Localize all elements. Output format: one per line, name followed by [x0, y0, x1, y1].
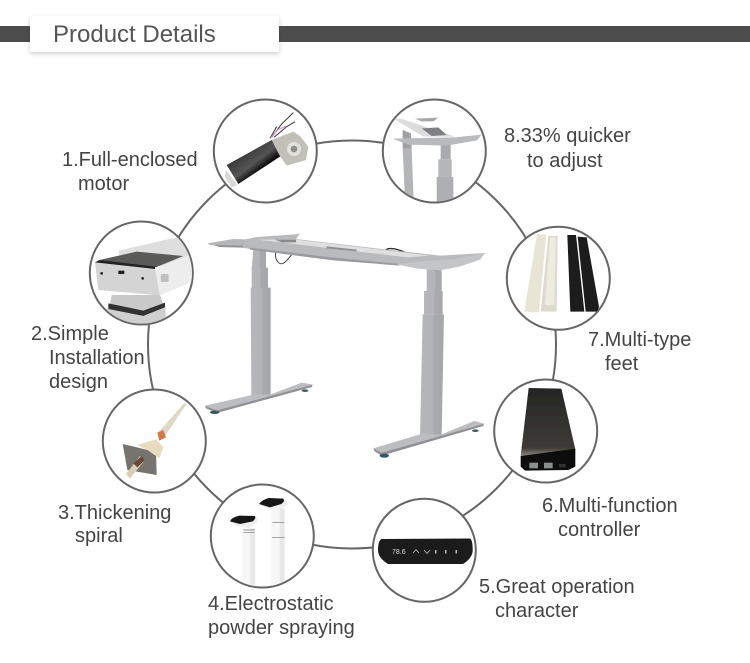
label: great operation character: 5.Great operation — [479, 576, 635, 598]
heading: Product Details: Product Details — [53, 21, 216, 48]
label: thickening spiral — [58, 502, 171, 547]
feature 1: motor — [62, 100, 317, 202]
label: great operation character: character — [495, 600, 579, 622]
feature 3: spiral — [58, 390, 206, 547]
label: electrostatic powder spraying — [208, 593, 355, 639]
label: simple installation design: 2.Simple — [31, 323, 109, 345]
heading: Product Details — [30, 16, 279, 52]
header bar — [0, 16, 750, 52]
label: great operation character — [479, 576, 635, 622]
label: thickening spiral: spiral — [75, 525, 123, 547]
label: electrostatic powder spraying: 4.Electrostatic — [208, 593, 334, 615]
feature 7: feet — [507, 227, 691, 375]
desk frame — [205, 233, 485, 458]
icon: control panel: 78.6 — [392, 549, 406, 556]
label: full-enclosed motor: 1.Full-enclosed — [62, 149, 198, 171]
icon: motor — [225, 113, 308, 188]
label: simple installation design — [31, 323, 145, 393]
connecting ring — [148, 140, 556, 548]
icon: desk corner — [393, 118, 482, 205]
label: multi-type feet: 7.Multi-type — [588, 329, 691, 351]
feature 6: controller — [494, 380, 678, 541]
icon: mounting bracket — [95, 237, 197, 327]
label: simple installation design: design — [49, 371, 108, 393]
label: multi-type feet — [588, 329, 691, 375]
icon: controller box — [521, 388, 575, 471]
feature 2: installation — [31, 222, 197, 393]
label: quicker to adjust: 8.33% quicker — [504, 125, 631, 147]
label: thickening spiral: 3.Thickening — [58, 502, 171, 524]
label: full-enclosed motor: motor — [78, 173, 129, 195]
feature 4: powder spraying — [208, 484, 355, 639]
label: multi-function controller: 6.Multi-function — [542, 495, 678, 517]
label: quicker to adjust — [504, 125, 631, 172]
icon: spiral screw — [123, 403, 187, 479]
label: simple installation design: Installation — [49, 347, 145, 369]
label: multi-function controller: controller — [558, 519, 641, 541]
feature 5: operation character — [373, 499, 635, 622]
feature 8: quicker to adjust — [383, 100, 631, 205]
label: multi-function controller — [542, 495, 678, 541]
label: quicker to adjust: to adjust — [527, 150, 603, 172]
icon: white legs — [230, 498, 287, 588]
label: full-enclosed motor — [62, 149, 198, 195]
icon: foot bars — [524, 234, 599, 312]
icon: control panel — [378, 538, 473, 564]
label: multi-type feet: feet — [605, 353, 639, 375]
label: electrostatic powder spraying: powder spraying — [208, 617, 355, 639]
